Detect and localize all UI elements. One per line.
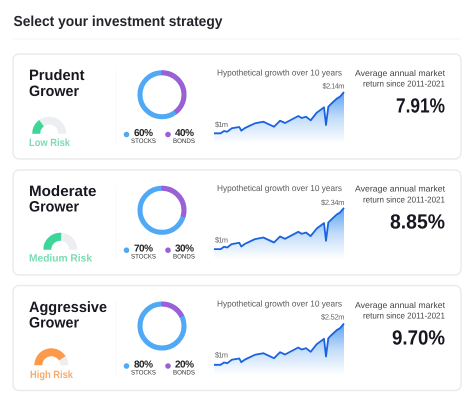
heading: Aggressive Grower	[29, 299, 107, 332]
return description: return since 2011-2021	[363, 310, 445, 320]
return value: 8.85%	[390, 210, 445, 233]
legend: BONDS	[173, 138, 196, 145]
panel: Moderate Grower	[13, 170, 461, 275]
return value: 9.70%	[392, 326, 445, 349]
return description: Average annual market	[355, 300, 446, 310]
return description: return since 2011-2021	[363, 79, 445, 89]
heading: Prudent Grower: Grower	[29, 83, 79, 100]
line chart: growth to $2.52m: $2.52m	[321, 313, 344, 322]
return description: Average annual market	[355, 184, 446, 194]
donut chart: 80 / 20	[140, 304, 184, 348]
return description: Average annual market	[355, 68, 446, 78]
return description: return since 2011-2021	[363, 194, 445, 204]
return value: 7.91%	[396, 95, 445, 118]
chart title: Hypothetical growth over 10 years	[217, 183, 342, 193]
panel: Aggressive Grower	[13, 286, 461, 390]
icon: high risk gauge	[38, 352, 64, 365]
title: Select your investment strategy	[14, 14, 222, 30]
line chart: growth to $2.34m: $2.34m	[321, 198, 344, 207]
risk label: Low Risk	[29, 137, 70, 149]
line chart: growth to $2.14m: $1m	[215, 120, 228, 129]
chart title: Hypothetical growth over 10 years	[217, 299, 342, 309]
legend: 30%	[175, 244, 194, 255]
return description	[355, 68, 446, 89]
legend: BONDS	[173, 370, 196, 376]
icon: medium risk gauge	[47, 237, 73, 250]
icon: low risk gauge	[36, 121, 62, 134]
legend: STOCKS	[131, 138, 157, 145]
legend: STOCKS	[131, 370, 157, 376]
line chart: growth to $2.34m: $1m	[215, 236, 228, 245]
heading: Moderate Grower: Moderate	[29, 183, 96, 200]
legend	[124, 128, 196, 145]
chart title: Hypothetical growth over 10 years	[217, 68, 342, 78]
line chart: growth to $2.52m	[214, 313, 344, 375]
legend: 80%	[134, 360, 153, 370]
legend: BONDS	[173, 254, 196, 261]
heading: Aggressive Grower: Grower	[29, 315, 79, 332]
donut chart: 60 / 40	[140, 73, 184, 117]
legend: 70%	[134, 244, 153, 255]
line chart: growth to $2.14m: $2.14m	[322, 82, 344, 91]
legend: 40%	[175, 128, 194, 139]
legend: STOCKS	[131, 254, 157, 261]
line chart: growth to $2.52m: $1m	[215, 351, 228, 360]
heading: Prudent Grower	[29, 67, 85, 100]
risk label: Medium Risk	[29, 253, 92, 265]
heading: Aggressive Grower: Aggressive	[29, 299, 107, 316]
line chart: growth to $2.14m	[214, 82, 344, 143]
return description	[355, 300, 446, 320]
legend: 60%	[134, 128, 153, 139]
donut chart: 70 / 30	[140, 188, 184, 232]
heading: Prudent Grower: Prudent	[29, 67, 85, 84]
legend: 20%	[175, 360, 194, 370]
heading: Moderate Grower: Grower	[29, 199, 79, 216]
risk label: High Risk	[30, 369, 73, 381]
line chart: growth to $2.34m	[214, 198, 344, 259]
legend	[124, 360, 196, 376]
legend	[124, 244, 196, 261]
panel: Prudent Grower	[13, 54, 461, 159]
heading: Moderate Grower	[29, 183, 96, 216]
return description	[355, 184, 446, 204]
